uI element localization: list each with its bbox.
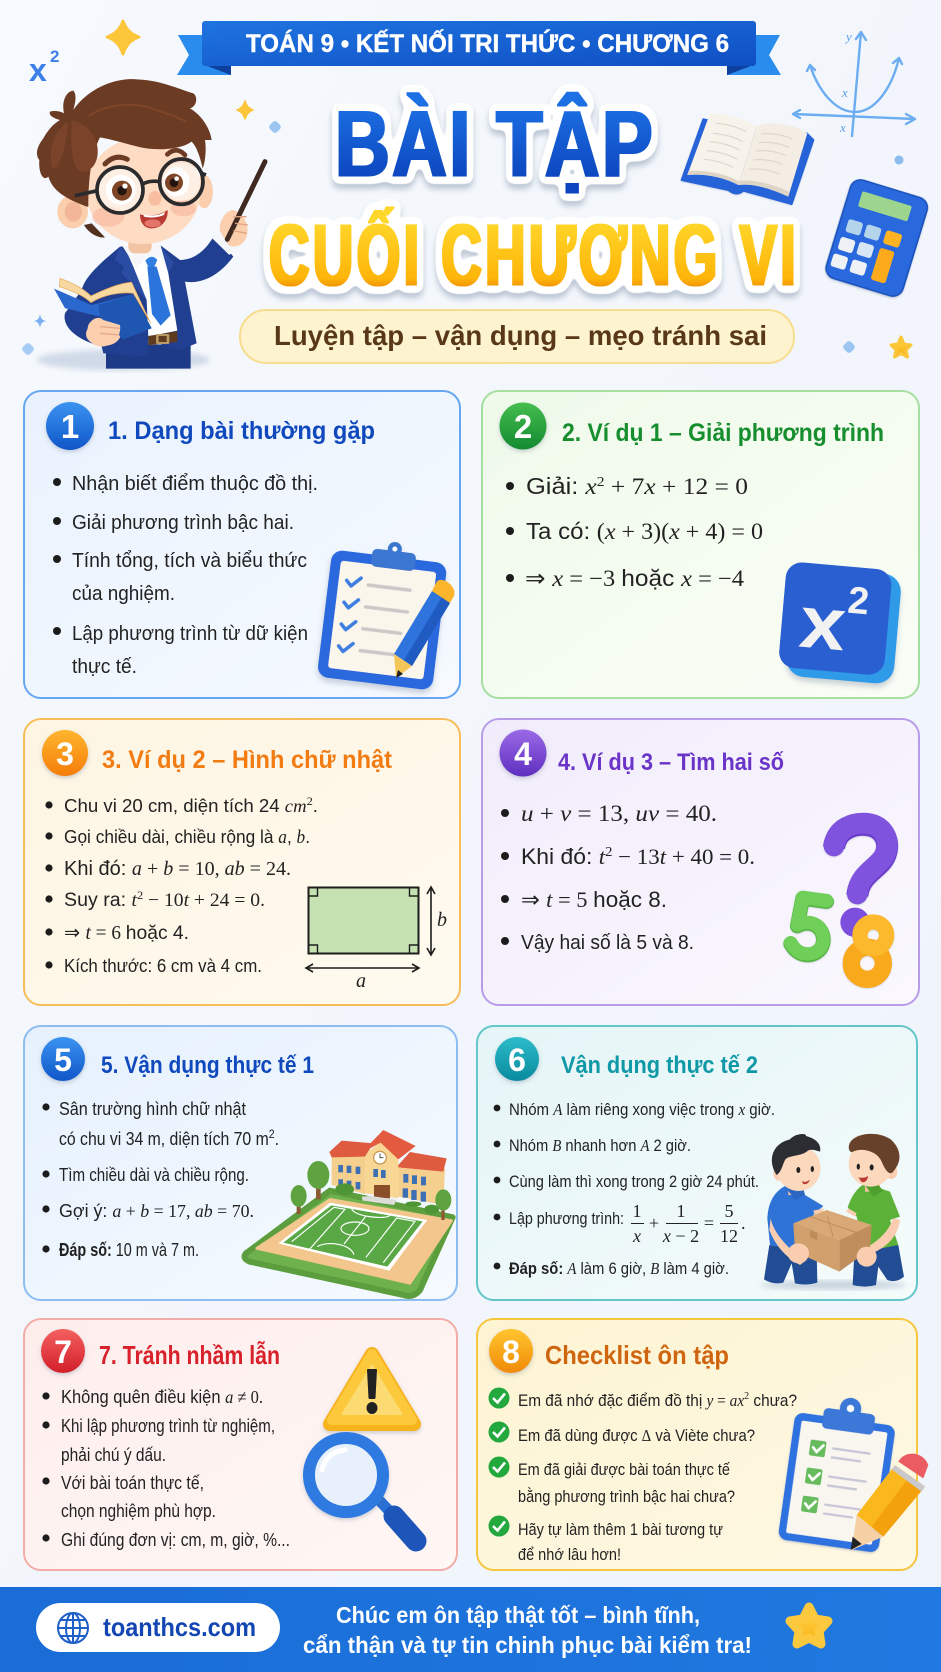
panel: 1. common exercise types bbox=[24, 391, 460, 698]
decor: stars and sparkles bbox=[21, 21, 911, 357]
problem list 6: Nhóm B nhanh hơn A 2 giờ. bbox=[509, 1136, 691, 1155]
heading 6: Vận dụng thực tế 2 bbox=[561, 1052, 758, 1079]
checklist items: để nhớ lâu hơn! bbox=[518, 1545, 621, 1564]
bullet list 1: Nhận biết điểm thuộc đồ thị. bbox=[72, 473, 318, 495]
heading 7: 7. Tránh nhầm lẫn bbox=[99, 1340, 280, 1370]
equations list 2 bbox=[506, 473, 763, 591]
icon: clipboard with blue pencil bbox=[317, 535, 455, 691]
problem list 5: Tìm chiều dài và chiều rộng. bbox=[59, 1165, 249, 1185]
solution list 3: Kích thước: 6 cm và 4 cm. bbox=[64, 956, 262, 976]
solution list 3: Gọi chiều dài, chiều rộng là a, b. bbox=[64, 826, 310, 848]
panel: 3. example 2 rectangle bbox=[24, 719, 460, 1005]
icon: school and sports field bbox=[245, 1130, 453, 1296]
formula: fractions equation: 5 bbox=[724, 1201, 734, 1221]
icon: calculator bbox=[823, 177, 930, 299]
badge 3 bbox=[42, 730, 88, 776]
icon: warning triangle bbox=[330, 1354, 414, 1424]
icon: open book bbox=[682, 113, 813, 204]
badge 4 bbox=[500, 730, 546, 776]
solution list 4: ⇒ t = 5 hoặc 8. bbox=[521, 887, 667, 912]
icon: x squared bbox=[29, 47, 59, 88]
formula: fractions equation: . bbox=[741, 1213, 746, 1233]
problem list 6: Nhóm A làm riêng xong việc trong x giờ. bbox=[509, 1100, 775, 1119]
badge 1: 1 bbox=[61, 408, 79, 445]
checklist items bbox=[488, 1388, 797, 1564]
badge 6 bbox=[495, 1037, 539, 1081]
equations list 2: ⇒ x = −3 hoặc x = −4 bbox=[525, 565, 745, 591]
formula: fractions equation bbox=[631, 1201, 746, 1246]
badge 8: 8 bbox=[502, 1334, 520, 1370]
icon: parabola graph: y bbox=[844, 29, 852, 44]
tips list 7: Không quên điều kiện a ≠ 0. bbox=[61, 1387, 263, 1407]
equations list 2: 2 bbox=[597, 475, 604, 490]
diagram: rectangle a by b bbox=[306, 887, 447, 992]
footer message: Chúc em ôn tập thật tốt – bình tĩnh, bbox=[336, 1602, 700, 1628]
bullet list 1: Lập phương trình từ dữ kiện bbox=[72, 623, 308, 645]
panel: 8. review checklist bbox=[477, 1319, 928, 1570]
title line 1: BÀI TẬP bbox=[335, 91, 655, 196]
badge 7: 7 bbox=[54, 1334, 72, 1370]
solution list 3: Khi đó: a + b = 10, ab = 24. bbox=[64, 858, 291, 880]
footer message bbox=[303, 1602, 752, 1658]
icon: globe bbox=[58, 1613, 88, 1643]
problem list 5: có chu vi 34 m, diện tích 70 m bbox=[59, 1129, 298, 1149]
heading 5: 5. Vận dụng thực tế 1 bbox=[101, 1052, 314, 1079]
problem list 5: Gợi ý: a + b = 17, ab = 70. bbox=[59, 1201, 254, 1221]
tips list 7: Khi lập phương trình từ nghiệm, bbox=[61, 1416, 275, 1436]
solution list 3: 2 bbox=[307, 794, 313, 808]
tips list 7: Ghi đúng đơn vị: cm, m, giờ, %... bbox=[61, 1530, 290, 1550]
solution list 4 bbox=[501, 801, 755, 954]
problem list 6 bbox=[494, 1100, 775, 1278]
solution list 3 bbox=[45, 794, 318, 976]
icon: x squared tile: x bbox=[796, 580, 849, 666]
problem list 6: Cùng làm thì xong trong 2 giờ 24 phút. bbox=[509, 1172, 759, 1191]
bullet list 1: thực tế. bbox=[72, 656, 137, 678]
formula: fractions equation: x − 2 bbox=[662, 1226, 699, 1246]
checklist items: Em đã giải được bài toán thực tế bbox=[518, 1460, 730, 1479]
problem list 6: Đáp số: A làm 6 giờ, B làm 4 giờ. bbox=[509, 1259, 729, 1278]
banner text: TOÁN 9 • KẾT NỐI TRI THỨC • CHƯƠNG 6 bbox=[246, 28, 729, 58]
problem list 5: Đáp số: 10 m và 7 m. bbox=[59, 1240, 199, 1260]
icon: two boys carrying a box bbox=[760, 1134, 907, 1290]
badge 4: 4 bbox=[514, 736, 532, 772]
tips list 7: phải chú ý dấu. bbox=[61, 1445, 166, 1465]
panel: 4. example 3 two numbers bbox=[482, 719, 919, 1005]
character: boy teacher with pointer and book bbox=[37, 79, 265, 371]
solution list 4: Khi đó: t bbox=[521, 844, 605, 869]
icon: question mark with 5 and 8 bbox=[791, 823, 887, 979]
problem list 5: . bbox=[275, 1129, 279, 1149]
icon: x squared tile bbox=[777, 561, 903, 685]
solution list 3: . bbox=[313, 796, 318, 816]
solution list 3: − 10 bbox=[143, 890, 184, 911]
equations list 2: x + 12 = 0 bbox=[644, 474, 739, 499]
checklist items: Em đã nhớ đặc điểm đồ thị y = ax bbox=[518, 1391, 746, 1410]
icon: x squared: x bbox=[29, 52, 47, 88]
icon: magnifying glass bbox=[309, 1438, 416, 1541]
icon: clipboard with yellow pencil bbox=[778, 1390, 928, 1553]
solution list 4: Vậy hai số là 5 và 8. bbox=[521, 932, 694, 954]
checklist items: Em đã dùng được Δ và Viète chưa? bbox=[518, 1426, 755, 1445]
badge 6: 6 bbox=[508, 1042, 526, 1078]
icon: parabola graph: x bbox=[841, 85, 848, 100]
tips list 7 bbox=[42, 1387, 290, 1550]
website pill: toanthcs.com bbox=[103, 1612, 256, 1642]
solution list 4: 2 bbox=[605, 845, 612, 860]
tips list 7: chọn nghiệm phù hợp. bbox=[61, 1501, 216, 1521]
badge 3: 3 bbox=[56, 736, 74, 772]
website pill bbox=[36, 1603, 280, 1652]
equations list 2: + 7 bbox=[604, 474, 644, 499]
subtitle pill bbox=[240, 310, 794, 363]
icon: x squared tile: 2 bbox=[846, 580, 871, 623]
solution list 3: Chu vi 20 cm, diện tích 24 cm bbox=[64, 796, 306, 816]
icon: parabola graph bbox=[793, 29, 915, 136]
solution list 4: − 13 bbox=[612, 844, 660, 869]
equations list 2: Ta có: (x + 3)(x + 4) = 0 bbox=[526, 518, 763, 544]
bullet list 1 bbox=[53, 473, 318, 678]
panel: 2. example 1 bbox=[482, 391, 919, 698]
diagram: rectangle a by b: a bbox=[356, 970, 366, 992]
solution list 4: u + v = 13, uv = 40. bbox=[521, 801, 717, 826]
problem list 6: Lập phương trình: bbox=[509, 1209, 624, 1228]
badge 8 bbox=[489, 1329, 533, 1373]
bullet list 1: Tính tổng, tích và biểu thức bbox=[72, 550, 307, 572]
subtitle pill: Luyện tập – vận dụng – mẹo tránh sai bbox=[274, 320, 767, 351]
panel: 5. real-life application 1 bbox=[24, 1026, 457, 1300]
ribbon banner bbox=[177, 21, 781, 75]
badge 7 bbox=[41, 1329, 85, 1373]
badge 2: 2 bbox=[514, 408, 532, 445]
equations list 2: Giải: x bbox=[526, 473, 596, 499]
heading 1: 1. Dạng bài thường gặp bbox=[108, 417, 375, 445]
checklist items: Hãy tự làm thêm 1 bài tương tự bbox=[518, 1520, 723, 1539]
checklist items: chưa? bbox=[749, 1391, 797, 1410]
heading 8: Checklist ôn tập bbox=[545, 1340, 729, 1370]
icon: x squared: 2 bbox=[50, 47, 59, 66]
problem list 5 bbox=[42, 1099, 279, 1260]
panel: 6. real-life application 2 bbox=[477, 1026, 917, 1300]
bullet list 1: của nghiệm. bbox=[72, 583, 175, 605]
footer message: cẩn thận và tự tin chinh phục bài kiểm tra! bbox=[303, 1632, 752, 1658]
panel: 7. avoiding mistakes bbox=[24, 1319, 457, 1570]
footer bar bbox=[0, 1587, 941, 1672]
formula: fractions equation: 1 bbox=[676, 1201, 686, 1221]
tips list 7: Với bài toán thực tế, bbox=[61, 1473, 204, 1493]
bullet list 1: Giải phương trình bậc hai. bbox=[72, 512, 294, 534]
heading 2: 2. Ví dụ 1 – Giải phương trình bbox=[562, 419, 884, 447]
diagram: rectangle a by b: b bbox=[437, 909, 447, 931]
heading 3: 3. Ví dụ 2 – Hình chữ nhật bbox=[102, 746, 393, 774]
formula: fractions equation: 12 bbox=[720, 1226, 738, 1246]
icon: star bbox=[790, 1607, 828, 1644]
heading 4: 4. Ví dụ 3 – Tìm hai số bbox=[558, 749, 784, 776]
checklist items: bằng phương trình bậc hai chưa? bbox=[518, 1487, 735, 1506]
solution list 3: t + 24 = 0. bbox=[184, 890, 263, 911]
formula: fractions equation: + bbox=[649, 1213, 659, 1233]
badge 5: 5 bbox=[54, 1042, 72, 1078]
formula: fractions equation: x bbox=[632, 1226, 641, 1246]
icon: parabola graph: x bbox=[839, 120, 846, 135]
formula: fractions equation: 1 bbox=[632, 1201, 642, 1221]
solution list 3: 2 bbox=[137, 888, 143, 902]
solution list 3: ⇒ t = 6 hoặc 4. bbox=[64, 922, 189, 944]
formula: fractions equation: = bbox=[704, 1213, 714, 1233]
badge 5 bbox=[41, 1037, 85, 1081]
badge 1 bbox=[46, 402, 94, 450]
badge 2 bbox=[500, 402, 546, 450]
problem list 5: 2 bbox=[269, 1127, 275, 1141]
solution list 3: Suy ra: t bbox=[64, 890, 137, 911]
solution list 4: t + 40 = 0. bbox=[660, 844, 751, 869]
problem list 5: Sân trường hình chữ nhật bbox=[59, 1099, 246, 1119]
checklist items: 2 bbox=[744, 1390, 749, 1402]
